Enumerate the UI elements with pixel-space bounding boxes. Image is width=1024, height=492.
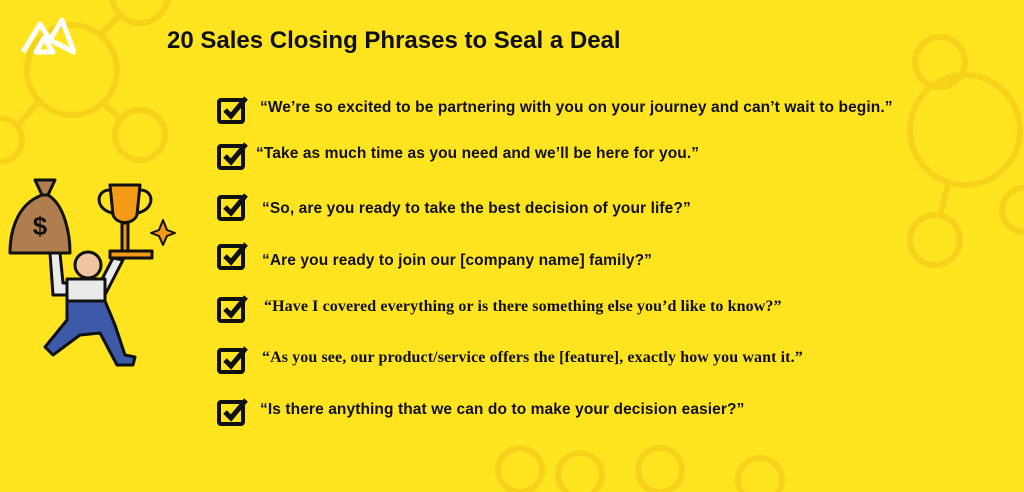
- title: 20 Sales Closing Phrases to Seal a Deal: [167, 27, 621, 54]
- logo: [20, 18, 76, 54]
- text: “Take as much time as you need and we’ll be here for you.”: [256, 145, 699, 162]
- illustration: [8, 178, 176, 366]
- text: “Are you ready to join our [company name] family?”: [262, 252, 652, 269]
- list: “We’re so excited to be partnering with you on your journey and can’t wait to begin.”: [260, 99, 893, 116]
- illustration: $: [33, 211, 48, 241]
- text: “Have I covered everything or is there something else you’d like to know?”: [264, 298, 782, 315]
- text: “As you see, our product/service offers the [feature], exactly how you want it.”: [262, 349, 803, 366]
- list: [217, 96, 893, 124]
- text: “Is there anything that we can do to make your decision easier?”: [260, 401, 744, 418]
- text: “So, are you ready to take the best decision of your life?”: [262, 200, 691, 217]
